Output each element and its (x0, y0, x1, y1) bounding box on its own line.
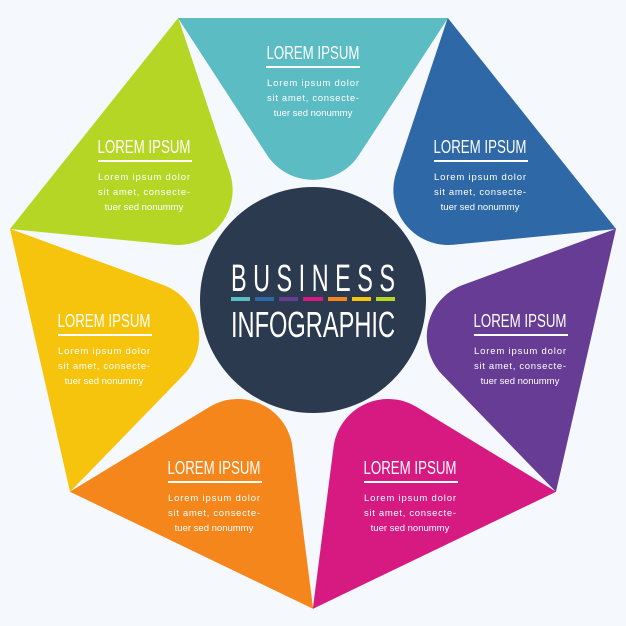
text block: teal (266, 43, 360, 119)
text block: green: LOREM IPSUM (98, 137, 190, 157)
text block: orange: sit amet, consecte- (168, 508, 260, 519)
segment: teal (178, 18, 448, 180)
text block: teal: tuer sed nonummy (274, 108, 353, 119)
text block: blue: sit amet, consecte- (434, 187, 526, 198)
text block: teal: LOREM IPSUM (266, 43, 360, 63)
segment: magenta (243, 346, 556, 609)
text block: blue: LOREM IPSUM (434, 137, 526, 157)
text block: orange (168, 458, 262, 534)
text block: green: Lorem ipsum dolor (98, 172, 190, 183)
text block: blue (434, 137, 528, 213)
text block: purple: LOREM IPSUM (474, 311, 566, 331)
text block: magenta: Lorem ipsum dolor (364, 493, 456, 504)
text block: blue: tuer sed nonummy (441, 202, 520, 213)
text block: purple (474, 311, 568, 387)
segment: purple (398, 193, 616, 492)
text block: orange: Lorem ipsum dolor (168, 493, 260, 504)
text block: teal: sit amet, consecte- (267, 93, 359, 104)
text block: yellow (58, 311, 152, 387)
text block: teal: Lorem ipsum dolor (267, 78, 359, 89)
text block: yellow: LOREM IPSUM (58, 311, 150, 331)
text block: yellow: sit amet, consecte- (58, 361, 150, 372)
text block: yellow: tuer sed nonummy (65, 376, 144, 387)
text block: magenta: sit amet, consecte- (364, 508, 456, 519)
text block: magenta (364, 458, 458, 534)
color bars (231, 297, 395, 301)
text block: purple: Lorem ipsum dolor (474, 346, 566, 357)
text block: magenta: LOREM IPSUM (364, 458, 456, 478)
text block: green: sit amet, consecte- (98, 187, 190, 198)
segment: blue (321, 18, 616, 330)
text block: purple: sit amet, consecte- (474, 361, 566, 372)
segment: green (10, 18, 305, 330)
segment: orange (70, 346, 383, 609)
text block: blue: Lorem ipsum dolor (434, 172, 526, 183)
text block: yellow: Lorem ipsum dolor (58, 346, 150, 357)
text block: green: tuer sed nonummy (105, 202, 184, 213)
text block: orange: LOREM IPSUM (168, 458, 260, 478)
text block: orange: tuer sed nonummy (175, 523, 254, 534)
text block: green (98, 137, 192, 213)
center circle (200, 187, 426, 413)
title: business: B U S I N E S S (231, 258, 395, 300)
title: infographic: INFOGRAPHIC (231, 304, 395, 345)
text block: magenta: tuer sed nonummy (371, 523, 450, 534)
segment: yellow (10, 193, 228, 492)
text block: purple: tuer sed nonummy (481, 376, 560, 387)
